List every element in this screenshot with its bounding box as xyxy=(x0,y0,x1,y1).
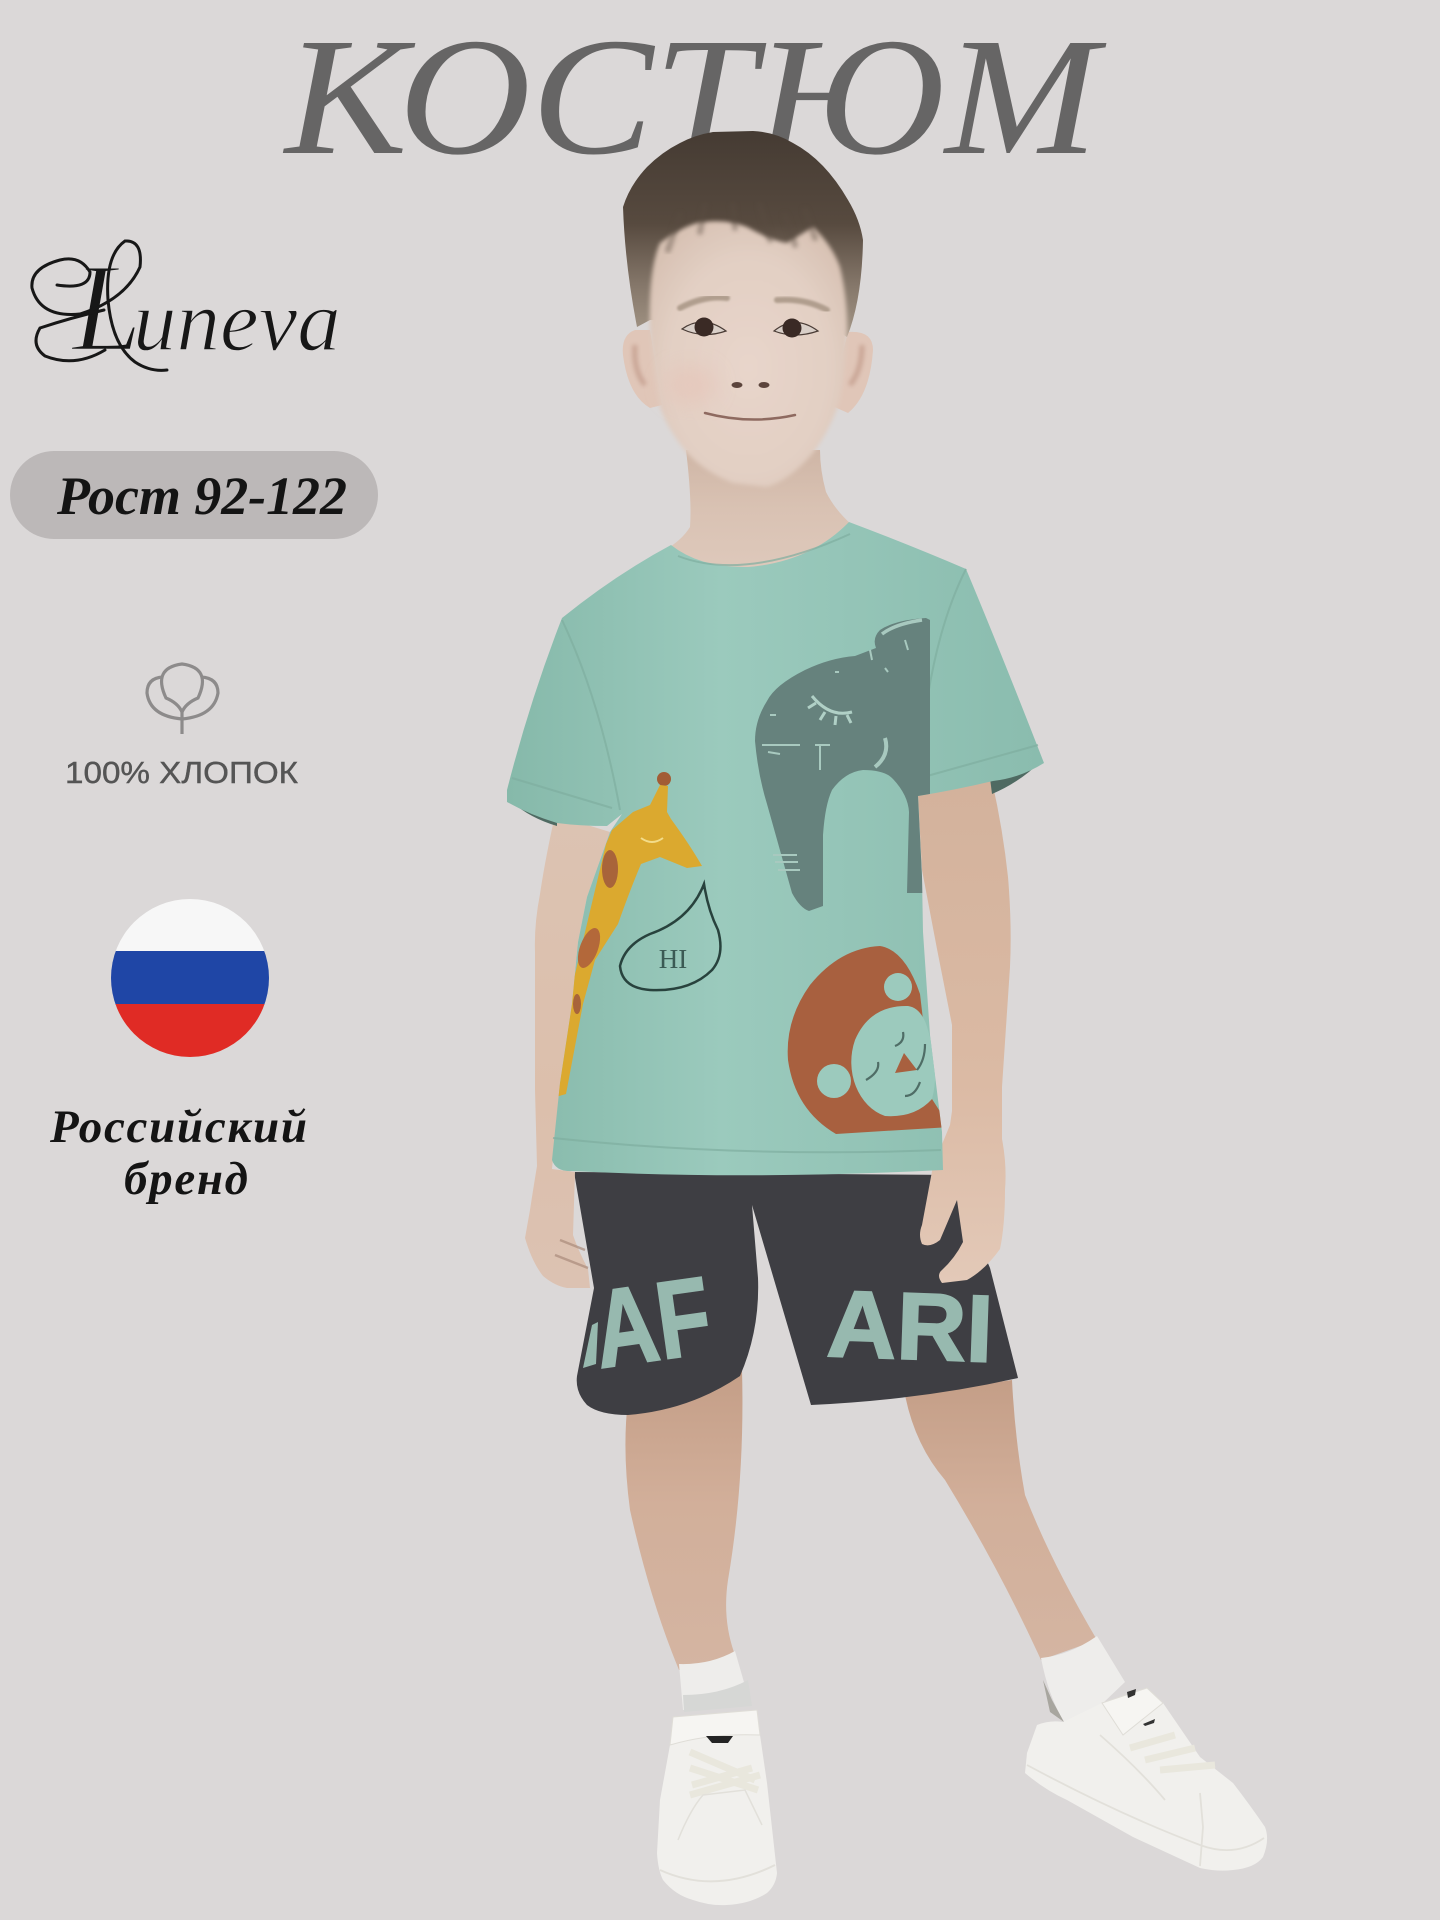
brand origin label: бренд xyxy=(124,1153,248,1205)
t-shirt xyxy=(507,522,1044,1175)
shorts xyxy=(574,1172,1018,1415)
mouth xyxy=(705,413,795,420)
shirt body xyxy=(507,522,1044,1175)
hair xyxy=(623,131,863,337)
shoe logo xyxy=(706,1736,733,1743)
print: lion xyxy=(788,946,950,1134)
boy model xyxy=(507,131,1267,1905)
left shoe xyxy=(657,1710,777,1905)
icon: cotton xyxy=(147,664,218,734)
shorts print right: ARI xyxy=(825,1271,995,1383)
shoe logo xyxy=(1127,1689,1155,1726)
brand logo xyxy=(32,239,341,378)
logo swash xyxy=(32,241,167,370)
title: КОСТЮМ xyxy=(283,4,1107,190)
shirt print group xyxy=(545,618,950,1134)
face xyxy=(650,221,847,487)
material label: 100% ХЛОПОК xyxy=(65,755,298,790)
collar and seams xyxy=(512,534,1038,1152)
print: speech bubble xyxy=(620,884,720,990)
legs xyxy=(625,1370,1097,1670)
nose xyxy=(732,382,770,388)
pill background xyxy=(10,451,378,539)
icon: russian flag xyxy=(110,899,270,1058)
russian brand badge xyxy=(49,899,307,1205)
brand origin label xyxy=(49,1101,307,1205)
logo wordmark: L xyxy=(70,239,142,378)
height pill xyxy=(10,451,378,539)
cotton material badge xyxy=(65,664,298,790)
bubble text: HI xyxy=(659,944,687,974)
shorts print left: AF xyxy=(586,1254,718,1392)
print: giraffe xyxy=(545,772,702,1100)
logo wordmark: uneva xyxy=(133,272,341,369)
socks xyxy=(679,1636,1125,1722)
cheeks xyxy=(664,365,716,405)
hair fringe xyxy=(668,205,815,250)
eyebrows xyxy=(680,297,827,310)
head xyxy=(623,131,873,487)
right arm and hand xyxy=(918,781,1011,1283)
brand origin label: Российский xyxy=(49,1101,307,1153)
shorts print cut letter xyxy=(583,1322,598,1368)
eyes xyxy=(682,318,818,338)
neck xyxy=(665,450,852,582)
sleeve undersides xyxy=(512,762,1040,826)
height label: Рост 92-122 xyxy=(56,466,347,526)
print: elephant xyxy=(755,618,930,911)
ears xyxy=(623,330,662,408)
right shoe xyxy=(1025,1688,1267,1871)
left arm and hand xyxy=(525,815,610,1288)
